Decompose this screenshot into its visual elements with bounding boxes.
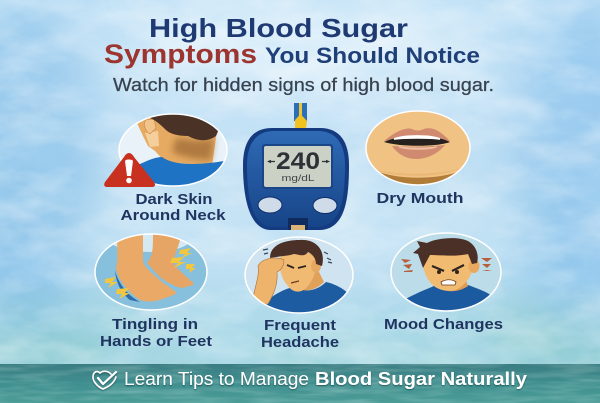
label: Dark Skin — [136, 191, 212, 208]
symptom: dry mouth — [366, 111, 472, 207]
label: Tingling in — [112, 316, 198, 333]
symptom: mood changes — [384, 233, 503, 333]
strip port — [288, 218, 308, 230]
symptom: dark skin around neck — [104, 112, 228, 224]
icon: heart check — [93, 371, 116, 389]
glucose meter — [243, 103, 349, 230]
label — [100, 316, 212, 350]
call to action: Blood Sugar Naturally — [315, 369, 527, 389]
icon: mouth — [366, 111, 472, 190]
symptom: headache — [245, 237, 356, 351]
label: Around Neck — [120, 207, 226, 224]
screen: mg/dL — [282, 173, 314, 183]
heading line 2: You Should Notice — [265, 43, 480, 68]
icon: man holding head — [245, 237, 356, 320]
subtitle: Watch for hidden signs of high blood sugar. — [113, 75, 494, 95]
symptom: tingling — [95, 228, 212, 350]
icon: neck — [119, 112, 228, 190]
label: Frequent — [264, 317, 336, 334]
icon: warning triangle — [104, 153, 155, 187]
call to action — [124, 369, 527, 389]
meter body — [243, 128, 349, 230]
label: Hands or Feet — [100, 333, 212, 350]
icon: feet — [95, 228, 207, 310]
label: Dry Mouth — [376, 190, 464, 207]
label — [261, 317, 339, 351]
label — [120, 191, 226, 224]
screen: 240 — [276, 148, 320, 175]
screen — [262, 144, 333, 189]
title — [104, 13, 480, 69]
heading line 1: High Blood Sugar — [149, 13, 408, 43]
test strip — [294, 103, 307, 128]
call to action: Learn Tips to Manage — [124, 369, 309, 389]
icon: angry man — [391, 233, 501, 320]
label: Headache — [261, 334, 339, 351]
footer banner — [0, 364, 600, 403]
label: Mood Changes — [384, 316, 503, 333]
buttons — [258, 197, 337, 214]
heading line 2 accent: Symptoms — [104, 39, 257, 69]
